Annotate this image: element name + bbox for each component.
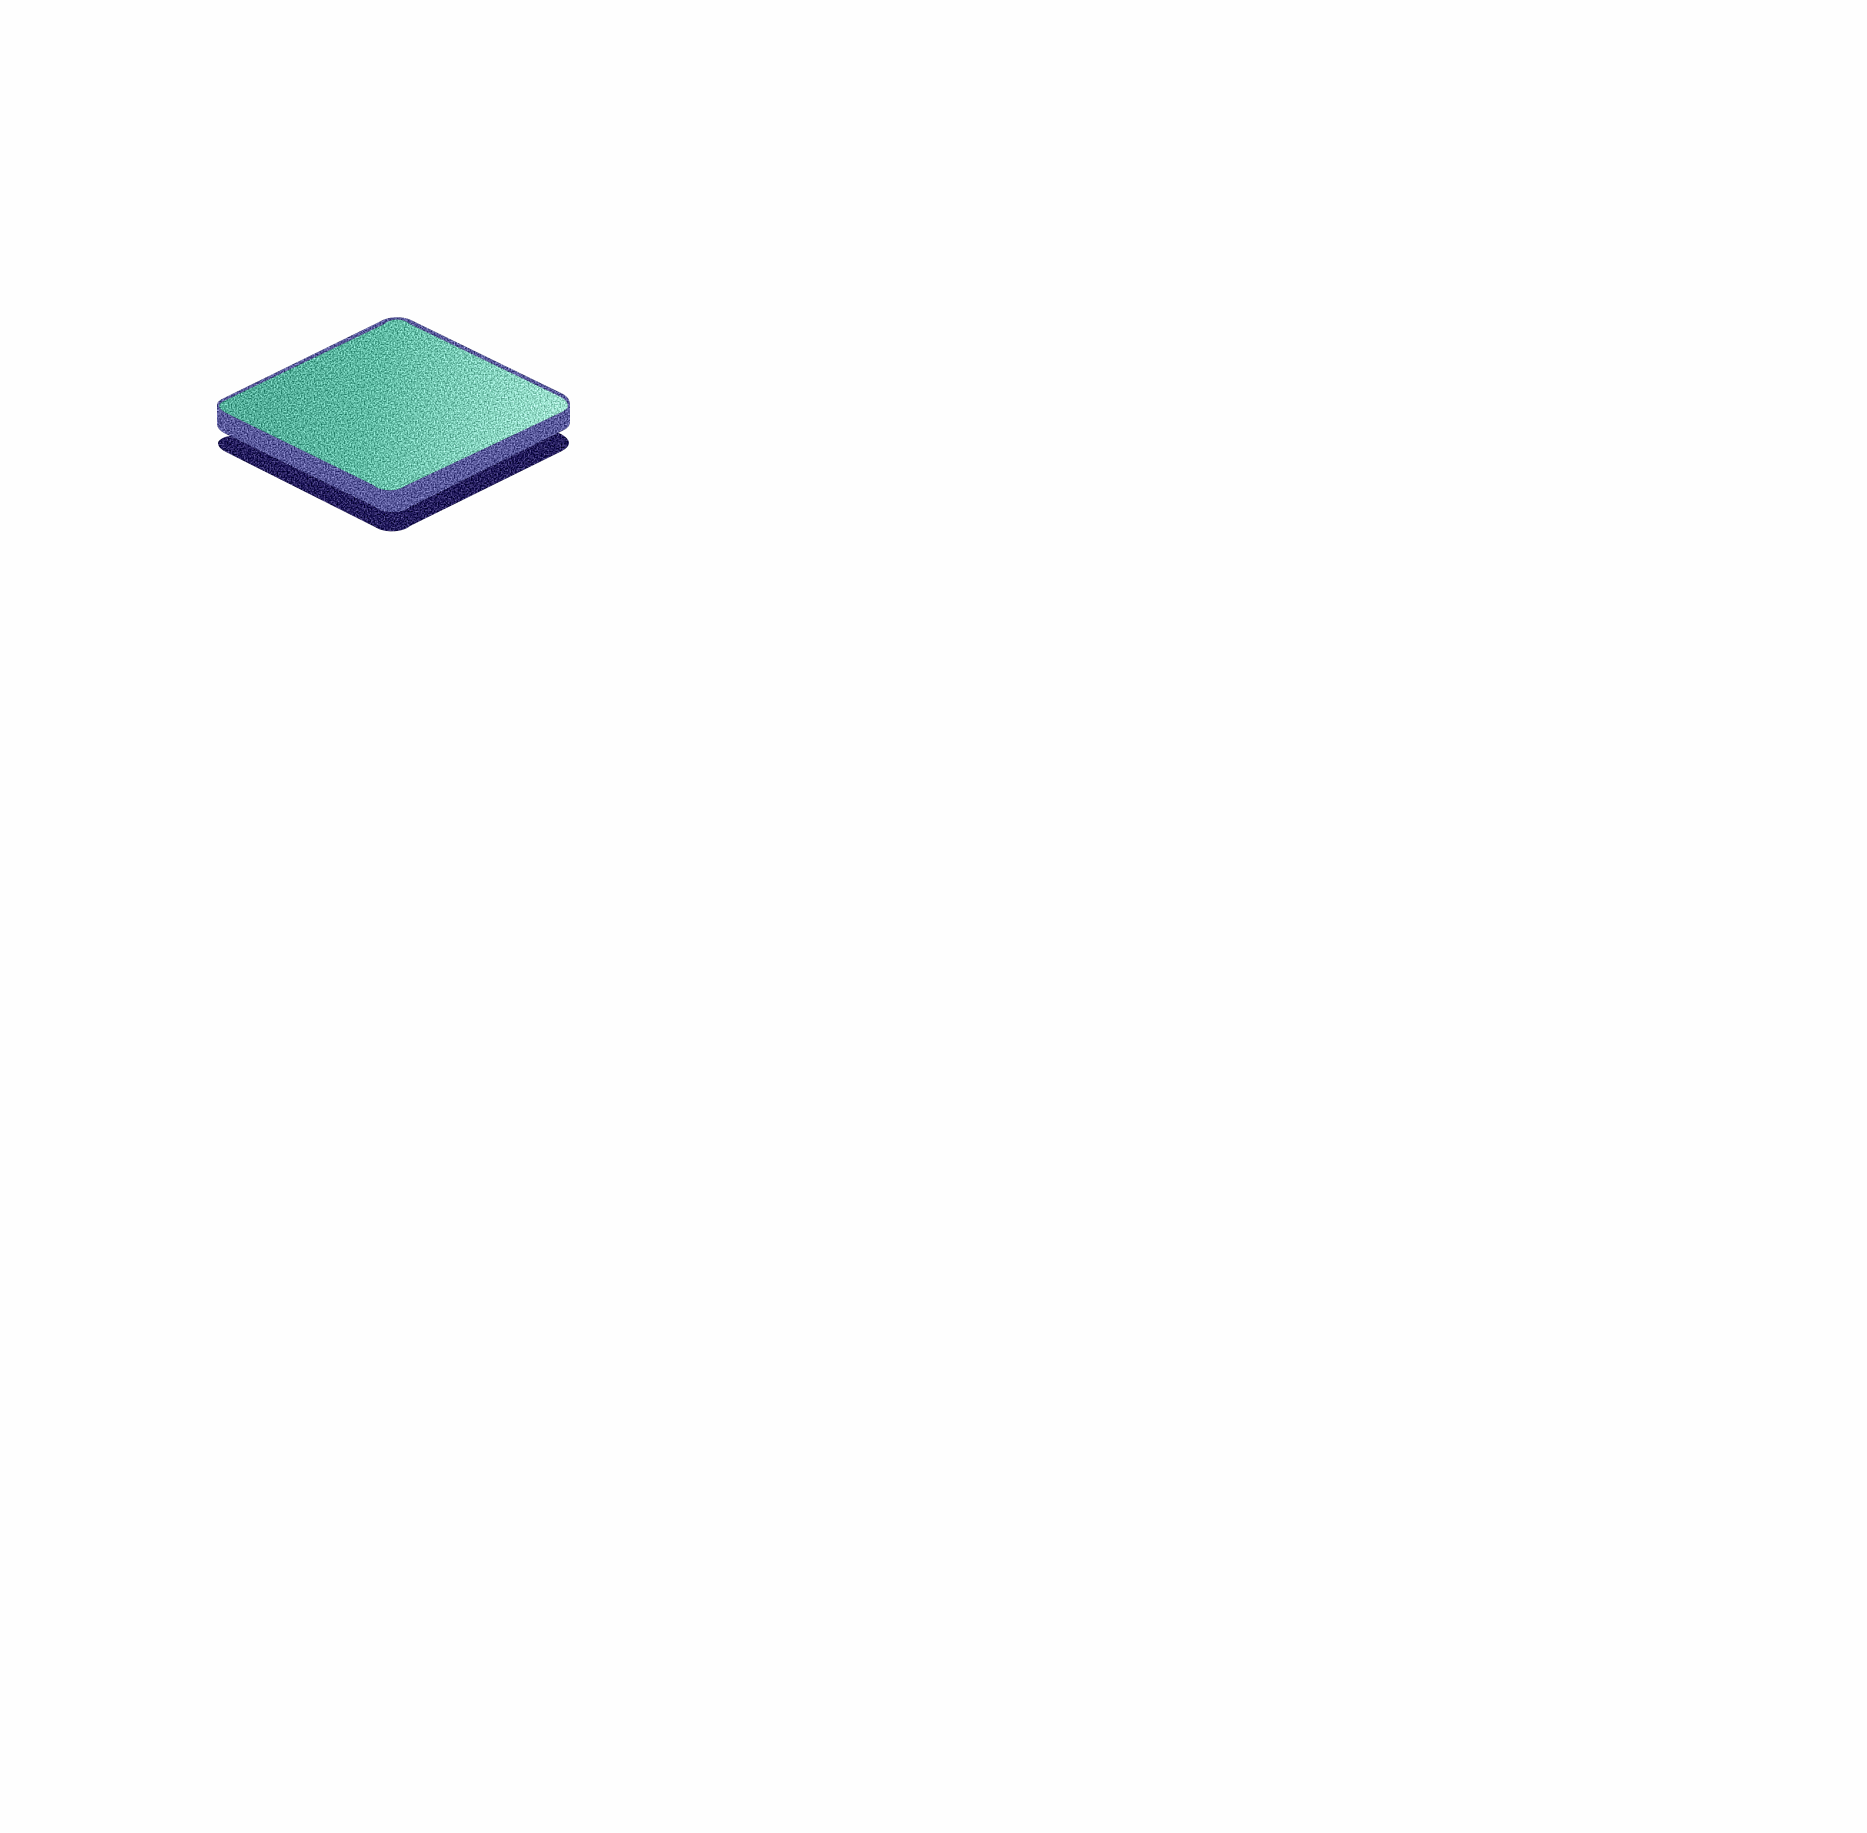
platform rim xyxy=(217,317,570,512)
platform top surface xyxy=(219,320,568,490)
platform shadow base xyxy=(218,400,569,531)
icon: isometric platform xyxy=(217,317,570,531)
